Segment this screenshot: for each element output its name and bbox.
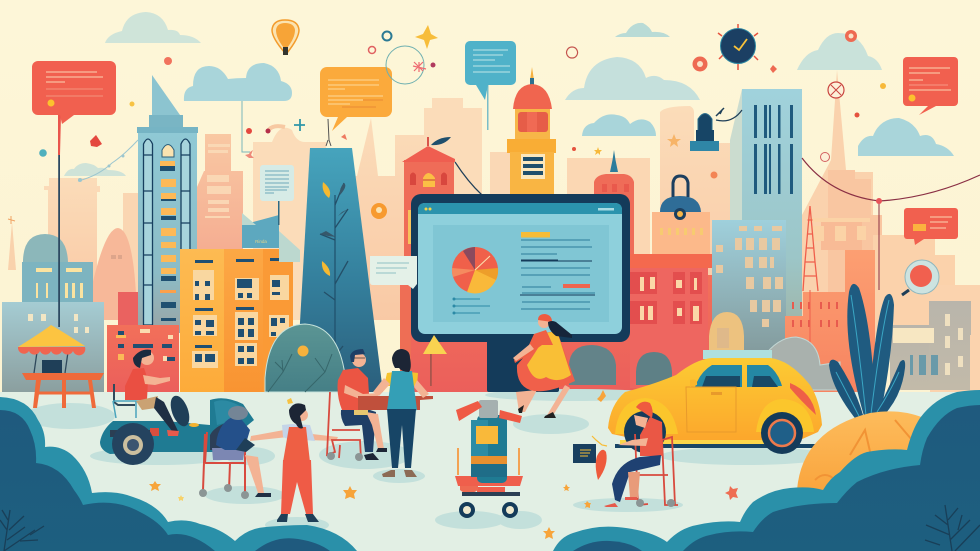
skyscraper: left teal tower (137, 75, 198, 333)
person slumped in red chair (199, 406, 271, 499)
red left building (107, 325, 179, 392)
ground (0, 392, 980, 551)
woman in yellow dress (513, 314, 575, 418)
small teal building with sign: Rinda (255, 239, 267, 244)
standing person with teal apron (373, 349, 429, 477)
magnifier icon (902, 260, 939, 295)
tall blue building right (709, 89, 802, 350)
left pole with red speech bubble (32, 61, 116, 327)
seated person at table (327, 349, 433, 461)
left dome and blue buildings (2, 234, 138, 392)
grey hill by car (760, 337, 840, 390)
person with left blue car (100, 350, 254, 465)
orange speech bubble with hook (320, 67, 392, 146)
small decorative sky icons (8, 25, 886, 270)
grey building far right (890, 301, 980, 390)
seated man with board (573, 402, 678, 507)
yellow lamp (423, 335, 447, 386)
standing person in red overalls (250, 398, 338, 522)
red base building behind monitor (400, 254, 712, 393)
monitor (411, 194, 630, 392)
scattered ground stars (149, 390, 738, 539)
paper note beside monitor (370, 256, 417, 289)
small lock tower with wire (690, 108, 742, 151)
ground shadows (25, 389, 830, 533)
peach building right of clock (567, 150, 650, 290)
orange building with windows (180, 249, 293, 392)
pie chart (452, 247, 498, 293)
umbrella table (18, 325, 104, 408)
right foreground bush (553, 390, 980, 551)
red speech bubble lower right (904, 208, 958, 245)
wire from red tower (455, 162, 482, 195)
check badge icon (718, 24, 758, 70)
right orange brick buildings and Eiffel tower (785, 206, 875, 400)
hill with yellow circle (265, 324, 345, 392)
background peach skyline (44, 70, 980, 400)
teal speech bubble on pole (465, 41, 516, 130)
screen text lines (452, 232, 595, 314)
left foreground bush (0, 397, 357, 551)
teal spire tower with plant (296, 148, 383, 392)
robot (455, 400, 523, 518)
clouds (64, 12, 954, 176)
paper note on pole (260, 165, 294, 225)
lightbulb icon (272, 20, 299, 55)
tall dark plant (829, 284, 905, 422)
red speech bubble top right (903, 57, 958, 115)
yellow car (608, 350, 822, 454)
clock tower yellow (507, 67, 556, 194)
hanging cable with red pole (802, 158, 980, 290)
small teal building with sign (242, 213, 300, 262)
padlock building (652, 176, 710, 260)
large orange dome (797, 411, 924, 500)
blue car (100, 393, 254, 465)
red tower with window (402, 137, 455, 290)
